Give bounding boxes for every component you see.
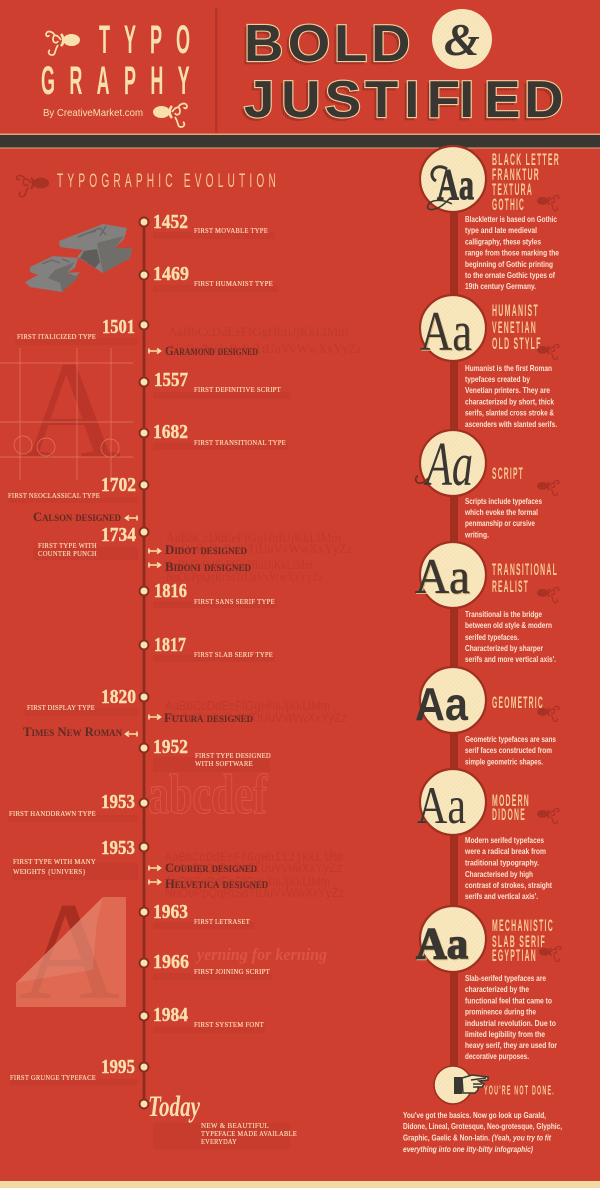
panel: modern: DIDONE: [492, 806, 526, 824]
ornament: black letter: [537, 195, 559, 211]
text: script: which evoke the formal: [464, 507, 538, 517]
text: black letter: calligraphy, these styles: [465, 236, 541, 246]
ghost alphabets: AaBbCcDdEeFfGgHhIiJjKkLlMm: [166, 530, 341, 545]
text: black letter: range from those marking the: [465, 248, 559, 258]
event: 1469: 1469: [153, 263, 189, 285]
ghost alphabets: AaBbCcDdEeFfGgHhIiJjKkLlMm: [165, 850, 343, 865]
event: 1984: FIRST SYSTEM FONT: [194, 1020, 264, 1029]
event: 1817: [140, 634, 273, 659]
text: script: penmanship or cursive: [465, 518, 535, 528]
ornament: modern: [537, 808, 559, 824]
dark band: [0, 134, 600, 148]
event: 1734: FIRST TYPE WITH: [38, 541, 97, 550]
note: Garamond designed: Garamond designed: [165, 343, 258, 358]
text: mechanistic: limited legibility from the: [465, 1029, 545, 1039]
event: 1501: [17, 316, 148, 341]
text: black letter: beginning of Gothic printing: [465, 259, 553, 269]
text: mechanistic: prominence during the: [465, 1006, 536, 1016]
event: 1452: [140, 211, 268, 235]
text: black letter: type and late medieval: [465, 225, 537, 235]
ornament: section: [17, 175, 49, 197]
panel: humanist: VENETIAN: [492, 319, 537, 337]
event: 1557: 1557: [154, 369, 188, 391]
badge: transitional: Aa: [416, 549, 471, 605]
event: 1953 handdrawn: 1953: [101, 791, 135, 813]
badge: script: Aa: [423, 431, 473, 499]
ghost alphabets: NnOoPpQqRrSsTtUuVvWwXxYyZz: [166, 541, 352, 556]
text: script: writing.: [464, 530, 489, 540]
text: geometric: simple geometric shapes.: [465, 756, 543, 766]
panel: mechanistic: [416, 906, 561, 1061]
ghost alphabets: AaBbCcDdEeFfGgHhIiJjKkLlMm: [165, 874, 330, 889]
panel: humanist: [420, 295, 559, 429]
badge: modern: Aa: [417, 777, 466, 835]
event: 1995: FIRST GRUNGE TYPEFACE: [10, 1073, 96, 1082]
panel: script: SCRIPT: [492, 465, 524, 483]
ghost alphabets: AaBbCcDdEeFfGgHhIiJjKkLlMm: [168, 324, 348, 339]
badge: black letter: Aa: [437, 160, 474, 209]
panel: script: [416, 430, 559, 540]
ghost alphabets: NnOoPpQqRrSsTtUuVvWwXxYyZz: [165, 710, 347, 725]
event: 1734: [38, 524, 148, 558]
event: 1963: 1963: [153, 901, 188, 923]
event: 1469: [140, 263, 273, 288]
event: today: NEW & BEAUTIFUL: [201, 1121, 269, 1130]
event: 1995: [10, 1056, 148, 1082]
badge: geometric: Aa: [415, 678, 468, 730]
note: Times New Roman: Times New Roman: [23, 724, 122, 739]
title word: BOLD: BOLD: [244, 15, 410, 73]
text: geometric: [465, 734, 556, 766]
ampersand badge: &: [444, 14, 480, 65]
heading: mechanistic: EGYPTIAN: [492, 947, 537, 965]
header: [41, 8, 564, 133]
text: humanist: serifs, slanted cross stroke &: [465, 408, 554, 418]
event: 1820: [27, 686, 148, 712]
event: 1469: FIRST HUMANIST TYPE: [194, 279, 273, 288]
text: mechanistic: heavy serif, they are used for: [465, 1040, 558, 1050]
ghost alphabets: NnOoPpQqRrSsTtUuVvWwXxYyZz: [166, 569, 323, 584]
event: today: EVERYDAY: [201, 1137, 237, 1146]
event: 1452: FIRST MOVABLE TYPE: [194, 226, 268, 235]
event: today: [140, 1090, 297, 1146]
ampersand badge: [432, 9, 492, 69]
timeline axis: [143, 222, 145, 1104]
event: 1702: FIRST NEOCLASSICAL TYPE: [8, 491, 100, 500]
text: black letter: [465, 214, 559, 291]
event: 1557: [140, 369, 281, 394]
event: 1820: FIRST DISPLAY TYPE: [27, 703, 95, 712]
text: closing note: Graphic, Gaelic & Non-latin. (Yeah, you try to fit: [403, 1132, 552, 1142]
text: humanist: typefaces created by: [465, 374, 530, 384]
event: 1952: FIRST TYPE DESIGNED: [195, 751, 271, 760]
event: 1816: [140, 580, 275, 606]
ornament: script: [537, 480, 559, 496]
text: transitional: [465, 609, 556, 664]
text: mechanistic: Slab-serifed typefaces are: [465, 973, 546, 983]
text: mechanistic: characterized by the: [465, 984, 529, 994]
heading: mechanistic: [492, 917, 554, 965]
text: transitional: serifed typefaces.: [465, 632, 519, 642]
illustration: letter A construction grid: A: [20, 333, 121, 488]
note: Futura designed: Futura designed: [164, 710, 253, 725]
ornament: top left: [46, 32, 80, 55]
section heading: typographic evolution: [17, 170, 280, 197]
event: 1953 many weights: FIRST TYPE WITH MANY: [13, 857, 96, 866]
footer band: [0, 1181, 600, 1188]
header: TYPO: [99, 18, 204, 62]
heading: transitional: [492, 561, 558, 596]
event: 1953 many weights: [13, 837, 148, 876]
section heading: typographic evolution: TYPOGRAPHIC EVOLUTION: [57, 170, 280, 192]
label shadow bands: [8, 232, 290, 1149]
ornament: geometric: [537, 706, 559, 722]
badge: mechanistic: Aa: [416, 919, 468, 968]
text: transitional: between old style & modern: [465, 620, 552, 630]
badge: black letter: [420, 146, 486, 212]
heading: black letter: TEXTURA: [492, 181, 533, 199]
event: 1501: 1501: [102, 316, 135, 338]
heading: black letter: [492, 151, 560, 214]
event: 1953 handdrawn: FIRST HANDDRAWN TYPE: [9, 809, 96, 818]
ornament: bottom right: [153, 104, 187, 127]
event: 1966: FIRST JOINING SCRIPT: [194, 967, 270, 976]
text: transitional: Transitional is the bridge: [465, 609, 542, 619]
logo: typography: [41, 18, 204, 127]
illustration: metal type blocks: [25, 224, 132, 292]
event: 1734: COUNTER PUNCH: [38, 549, 97, 558]
text: modern: [464, 835, 552, 901]
title word: JUSTIFIED: JUSTIFIED: [242, 74, 561, 131]
badge: mechanistic: Aa: [417, 920, 469, 969]
text: modern: contrast of strokes, straight: [465, 880, 552, 890]
text: modern: Modern serifed typefaces: [465, 835, 544, 845]
text: transitional: serifs and more vertical axis'.: [465, 654, 556, 664]
event: 1966: [140, 951, 270, 976]
event: 1952: 1952: [153, 736, 188, 758]
event: 1816: 1816: [154, 580, 187, 602]
text: mechanistic: [465, 973, 558, 1061]
text: script: [464, 496, 542, 540]
text: closing note: everything into one itty-bitty infographic): [403, 1144, 533, 1154]
title word: JUSTIFIED: JUSTIFIED: [244, 71, 564, 129]
panel: closing note: [403, 1066, 562, 1154]
note: Didot designed: Didot designed: [165, 542, 247, 557]
header divider: [215, 8, 218, 133]
text: black letter: Blackletter is based on Gothic: [465, 214, 557, 224]
type classification column: [403, 146, 562, 1154]
ornament: transitional: [537, 587, 559, 603]
title word: BOLD: BOLD: [242, 18, 408, 75]
text: script: Scripts include typefaces: [465, 496, 542, 506]
event: 1966: 1966: [153, 951, 189, 973]
event: 1682: 1682: [153, 421, 188, 443]
heading: humanist: [492, 302, 542, 353]
text: mechanistic: functional feel that came to: [465, 996, 552, 1006]
heading: transitional: REALIST: [492, 578, 529, 596]
event: 1953 handdrawn: [9, 791, 148, 818]
event: 1953 many weights: 1953: [101, 837, 135, 859]
text: geometric: serif faces constructed from: [465, 745, 552, 755]
event: 1452: 1452: [153, 211, 188, 233]
panel: transitional: [415, 542, 559, 664]
badge: transitional: Aa: [415, 548, 470, 604]
panel: modern: [417, 769, 559, 901]
text: transitional: Characterized by sharper: [465, 643, 544, 653]
event: today: Today: [148, 1090, 200, 1123]
note: Calson designed: Calson designed: [33, 509, 121, 524]
event: 1557: FIRST DEFINITIVE SCRIPT: [194, 385, 281, 394]
ghost alphabets: AaBbCcDdEeFfGgHhIiJjKkLlMm: [166, 557, 313, 572]
panel: modern: MODERN: [492, 792, 530, 810]
event: 1952: [140, 736, 271, 768]
ornament: humanist: [537, 344, 559, 360]
text: mechanistic: industrial revolution. Due to: [465, 1018, 556, 1028]
ghost alphabets: [165, 324, 362, 900]
text: humanist: Humanist is the first Roman: [465, 363, 552, 373]
event: 1953 many weights: WEIGHTS {UNIVERS}: [13, 867, 86, 876]
ghost: handdrawn letters: abcdef: [148, 764, 268, 826]
event: 1984: [140, 1004, 264, 1029]
text: modern: were a radical break from: [464, 846, 546, 856]
ghost alphabets: AaBbCcDdEeFfGgHhIiJjKkLlMm: [165, 698, 330, 713]
note: Helvetica designed: Helvetica designed: [165, 876, 268, 891]
event: 1817: 1817: [154, 634, 186, 656]
ghost alphabets: NnOoPpQqRrSsTtUuVvWwXxYyZz: [165, 885, 344, 900]
text: humanist: ascenders with slanted serifs.: [465, 419, 557, 429]
text: geometric: Geometric typefaces are sans: [465, 734, 556, 744]
event: today: TYPEFACE MADE AVAILABLE: [201, 1129, 297, 1138]
text: humanist: characterized by short, thick: [465, 396, 554, 406]
event: 1984: 1984: [153, 1004, 188, 1026]
note: Bidoni designed: Bidoni designed: [165, 559, 251, 574]
panel: humanist: HUMANIST: [492, 302, 539, 320]
ornament: mechanistic: [539, 946, 561, 962]
event: 1816: FIRST SANS SERIF TYPE: [194, 597, 275, 606]
event: 1963: [140, 901, 250, 926]
illustration: letraset sheet: A: [19, 874, 120, 1029]
timeline: [8, 211, 297, 1146]
text: humanist: [465, 363, 557, 429]
badge: transitional: [415, 542, 486, 608]
badge: mechanistic: [416, 906, 486, 972]
header: GRAPHY: [41, 59, 204, 103]
badge: humanist: Aa: [421, 302, 473, 364]
byline: By CreativeMarket.com: [43, 107, 143, 119]
ghost: joining script: yerning for kerning: [195, 945, 327, 964]
text: black letter: 19th century Germany.: [465, 281, 536, 291]
event: 1817: FIRST SLAB SERIF TYPE: [194, 650, 273, 659]
event: 1995: 1995: [101, 1056, 135, 1078]
panel: black letter: [420, 146, 560, 291]
note: Courier designed: Courier designed: [165, 860, 257, 875]
text: modern: traditional typography.: [465, 858, 539, 868]
ghost alphabets: NnOoPpQqRrSsTtUuVvWwXxYyZz: [170, 341, 362, 356]
event: 1820: 1820: [101, 686, 136, 708]
event: 1501: FIRST ITALICIZED TYPE: [17, 332, 96, 341]
panel: geometric: [415, 667, 559, 766]
ghost alphabets: NnOoPpQqRrSsTtUuVvWwXxYyZz: [165, 861, 343, 876]
icon: pointing hand: [434, 1066, 488, 1104]
event: 1734: 1734: [101, 524, 136, 546]
badge: geometric: [415, 667, 486, 733]
event: 1952: WITH SOFTWARE: [195, 759, 253, 768]
text: modern: Characterised by high: [465, 869, 533, 879]
text: humanist: Venetian printers. They are: [465, 385, 550, 395]
text: modern: serifs and vertical axis'.: [465, 891, 538, 901]
text: black letter: to the ornate Gothic types of: [465, 270, 555, 280]
event: 1682: FIRST TRANSITIONAL TYPE: [194, 438, 286, 447]
text: closing note: You've got the basics. Now go look up Garald,: [403, 1110, 546, 1120]
text: closing note: [403, 1110, 562, 1154]
event: 1682: [140, 421, 286, 447]
heading: black letter: GOTHIC: [492, 196, 525, 214]
event: 1702: [8, 474, 148, 500]
classification spine: [450, 179, 458, 1075]
badge: humanist: Aa: [420, 301, 472, 363]
event: 1963: FIRST LETRASET: [194, 917, 250, 926]
title: BOLD & JUSTIFIED: [242, 9, 564, 131]
heading: modern: [492, 792, 530, 824]
text: mechanistic: decorative purposes.: [465, 1051, 529, 1061]
event: 1702: 1702: [101, 474, 136, 496]
